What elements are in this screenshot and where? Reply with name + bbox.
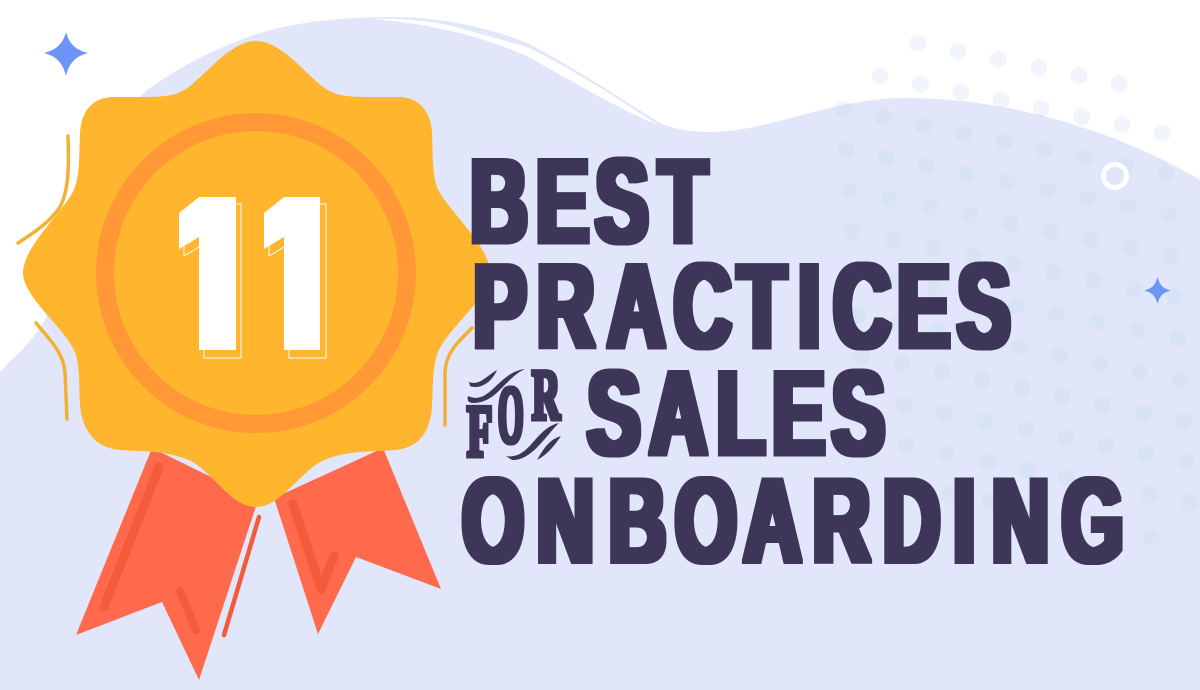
icon: white ring bbox=[1104, 164, 1126, 188]
title line: ONBOARDING: ONBOARDING bbox=[462, 453, 1123, 588]
title line: PRACTICES: PRACTICES bbox=[473, 239, 1010, 373]
badge: scalloped gold seal bbox=[23, 41, 490, 507]
title text bbox=[462, 134, 1123, 588]
number 11 bbox=[179, 197, 320, 350]
icon: sparkle top left bbox=[44, 32, 88, 76]
decorative pale dots above the blob bbox=[834, 35, 1198, 545]
badge: orange inner ring bbox=[105, 122, 407, 424]
letters F O R bbox=[467, 354, 561, 472]
letters F O R: O bbox=[498, 368, 524, 460]
award badge bbox=[18, 41, 490, 680]
ribbon: left tail bbox=[76, 448, 258, 680]
title word: FOR ornamental lettering bbox=[467, 354, 561, 472]
white highlight along blob edge bbox=[372, 19, 658, 125]
ribbon: right tail bbox=[274, 448, 441, 634]
letters F O R: F bbox=[467, 391, 492, 472]
ornamental swashes bbox=[468, 369, 561, 460]
number 11 outline shadow bbox=[184, 204, 326, 358]
dot pattern on the blob bbox=[836, 104, 1044, 116]
ribbon shading strokes bbox=[104, 467, 334, 635]
icon: sparkle right bbox=[1144, 277, 1171, 304]
accent curves around badge bbox=[18, 136, 472, 425]
letters F O R: R bbox=[532, 354, 561, 435]
title line: SALES: SALES bbox=[588, 346, 885, 481]
title line: BEST: BEST bbox=[470, 134, 707, 268]
